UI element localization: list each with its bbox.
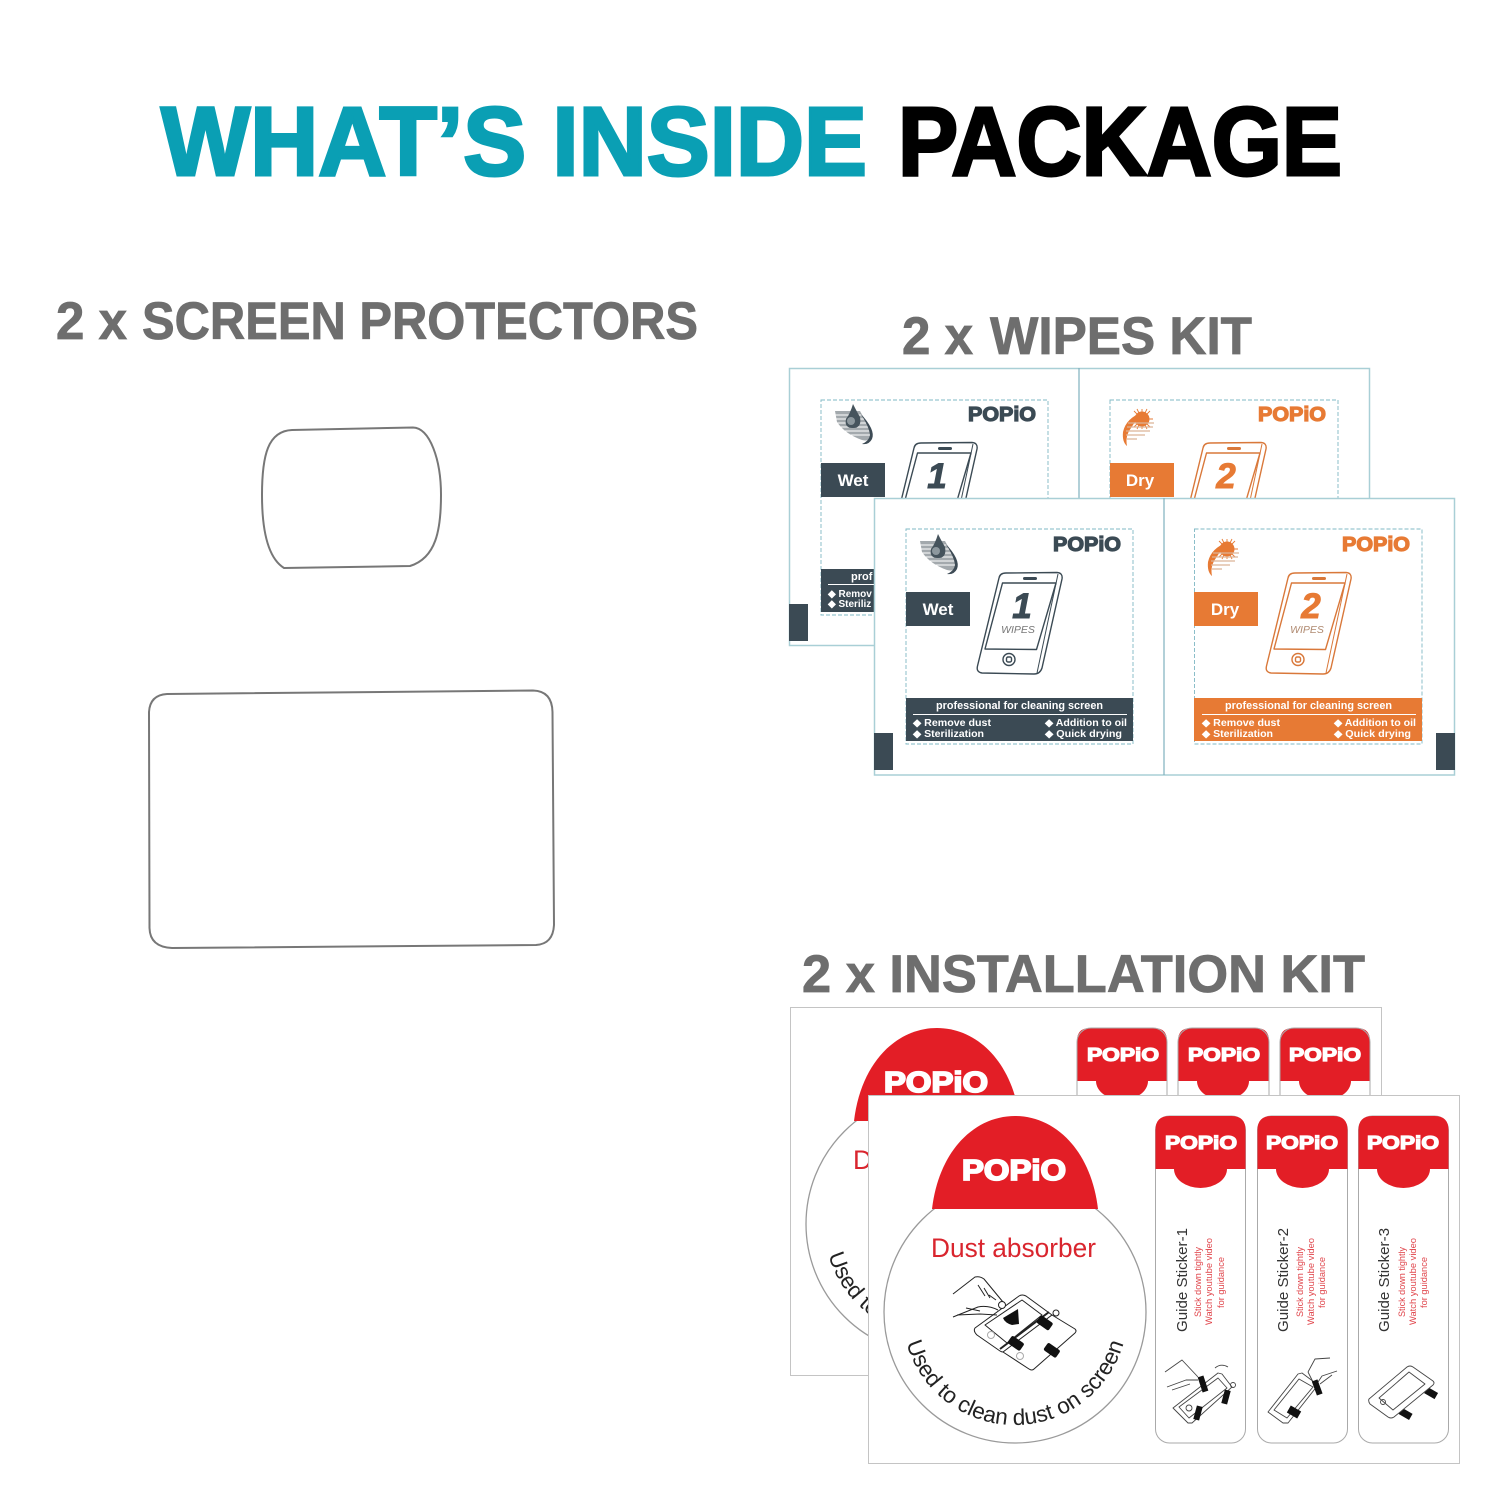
dry wipe: 2 [1300, 587, 1321, 626]
dust absorber sticker: Dust absorber [931, 1233, 1096, 1263]
guide sticker 3: Stick down tightly [1397, 1246, 1407, 1317]
heading: wipes kit: 2 x [902, 307, 973, 366]
dust absorber sticker: POPiO [962, 1155, 1066, 1187]
dry wipe [1194, 529, 1455, 770]
guide sticker 2: POPiO [1266, 1133, 1338, 1153]
heading: wipes kit: WIPES KIT [990, 307, 1252, 366]
guide sticker 3 [1358, 1116, 1448, 1443]
wipes kit: back packet: 1 [927, 457, 947, 496]
dry wipe: professional for cleaning screen [1225, 700, 1392, 712]
wipes kit: back packet: 2 [1215, 457, 1236, 496]
heading: screen protectors: 2 x [56, 292, 127, 351]
large screen protector outline [149, 690, 554, 948]
guide sticker 2 [1258, 1116, 1348, 1443]
wet wipe: Wet [923, 600, 954, 619]
guide sticker 1: Guide Sticker-1 [1174, 1228, 1191, 1332]
guide sticker 3: POPiO [1367, 1133, 1439, 1153]
wipes kit: back packet: Dry [1126, 471, 1155, 490]
guide sticker 1 [1156, 1116, 1246, 1443]
dry wipe: ◆ Addition to oil [1333, 718, 1416, 729]
wet wipe [874, 529, 1133, 770]
guide sticker 3: Watch youtube video [1408, 1238, 1418, 1325]
installation kit: front sheet [868, 1095, 1460, 1464]
guide sticker 2: Watch youtube video [1306, 1238, 1316, 1325]
wet wipe: WIPES [1001, 624, 1035, 636]
wet wipe: ◆ Sterilization [912, 729, 984, 740]
icon: step 2 [1268, 1358, 1337, 1423]
wipes kit: back packet: POPiO [1258, 404, 1326, 426]
installation kit: back sheet: POPiO [1087, 1045, 1159, 1065]
wet wipe: ◆ Remove dust [912, 718, 992, 729]
installation kit: back sheet: Dust absorber [853, 1145, 1020, 1175]
icon: hands cleaning phone [953, 1277, 1076, 1370]
title [161, 87, 1342, 196]
installation kit: back sheet: POPiO [1188, 1045, 1260, 1065]
guide sticker 1: Stick down tightly [1193, 1246, 1203, 1317]
dry wipe: ◆ Sterilization [1201, 729, 1273, 740]
wipes kit: back packet: Wet [838, 471, 869, 490]
wipes kit: back packet: prof [851, 571, 873, 583]
dry wipe: WIPES [1290, 624, 1324, 636]
installation kit: back sheet: POPiO [884, 1067, 988, 1099]
dry wipe: ◆ Quick drying [1333, 729, 1411, 740]
dry wipe: ◆ Remove dust [1201, 718, 1281, 729]
dry wipe: POPiO [1342, 534, 1410, 556]
installation kit: back sheet: POPiO [1289, 1045, 1361, 1065]
heading: screen protectors: SCREEN PROTECTORS [142, 292, 698, 351]
title: package: PACKAGE [898, 87, 1342, 196]
installation kit: back sheet [790, 1007, 1382, 1376]
wet wipe: ◆ Quick drying [1044, 729, 1122, 740]
title: what's inside: WHAT’S INSIDE [161, 87, 867, 196]
guide sticker 1: Watch youtube video [1204, 1238, 1214, 1325]
guide sticker 2: for guidance [1317, 1257, 1327, 1308]
wipes kit: back packet: ◆ Remov [827, 589, 872, 600]
guide sticker 3: Guide Sticker-3 [1376, 1228, 1393, 1332]
installation kit: back sheet: Used to clean dust on screen [830, 1251, 868, 1314]
small screen protector outline [262, 428, 441, 568]
dry wipe: Dry [1211, 600, 1240, 619]
dust absorber sticker: Used to clean dust on screen [908, 1340, 1124, 1426]
wipes kit: back packet: ◆ Steriliz [827, 599, 871, 610]
guide sticker 2: Stick down tightly [1295, 1246, 1305, 1317]
wet wipe: ◆ Addition to oil [1044, 718, 1127, 729]
guide sticker 3: for guidance [1419, 1257, 1429, 1308]
guide sticker 1: POPiO [1165, 1133, 1237, 1153]
icon: step 3 [1369, 1366, 1438, 1420]
wipes kit: back packet: POPiO [968, 404, 1036, 426]
wipes kit: front packet [874, 498, 1455, 775]
guide sticker 2: Guide Sticker-2 [1275, 1228, 1292, 1332]
dust absorber sticker [883, 1116, 1147, 1444]
wipes kit: back packet [789, 368, 1370, 646]
guide sticker 1: for guidance [1216, 1257, 1226, 1308]
wet wipe: POPiO [1053, 534, 1121, 556]
heading: installation kit: 2 x INSTALLATION KIT [802, 945, 1365, 1004]
wet wipe: 1 [1012, 587, 1032, 626]
icon: step 1 [1165, 1360, 1236, 1423]
wet wipe: professional for cleaning screen [936, 700, 1103, 712]
